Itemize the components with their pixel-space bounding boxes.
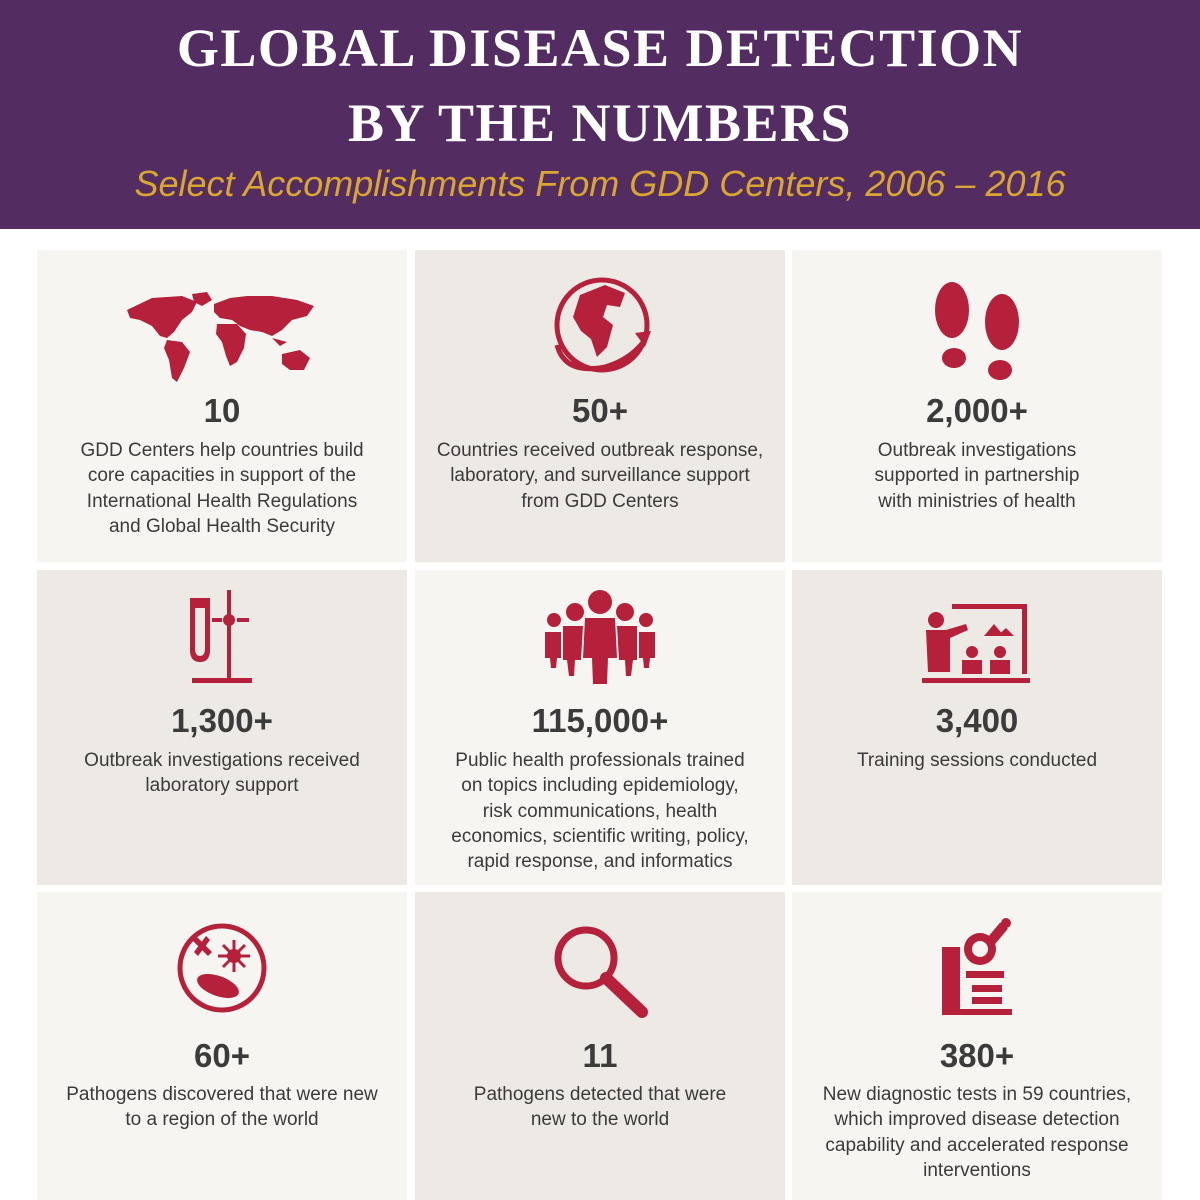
text: [474, 1084, 726, 1130]
text: [66, 1084, 378, 1130]
text: [451, 750, 749, 872]
text: [84, 750, 360, 796]
title line 1: GLOBAL DISEASE DETECTION: [177, 18, 1023, 78]
subtitle: Select Accomplishments From GDD Centers, 2006 – 2016: [134, 163, 1066, 204]
title line 2: BY THE NUMBERS: [348, 93, 852, 153]
text: Outbreak investigations: [878, 440, 1076, 461]
text: Pathogens detected that were: [474, 1084, 726, 1105]
number: 10: [204, 392, 240, 429]
text: supported in partnership: [875, 465, 1079, 486]
text: New diagnostic tests in 59 countries,: [823, 1084, 1131, 1105]
text: interventions: [923, 1160, 1031, 1181]
text: laboratory support: [145, 775, 299, 796]
icon: classroom: [922, 604, 1030, 683]
number: 1,300+: [171, 702, 273, 739]
text: Outbreak investigations received: [84, 750, 360, 771]
panel: 1,300+ lab support: [37, 570, 407, 885]
panel: 2,000+ investigations: [792, 250, 1162, 562]
number: 11: [583, 1037, 617, 1074]
panel: 60+ pathogens: [37, 892, 407, 1200]
icon: microscope: [942, 918, 1012, 1015]
text: core capacities in support of the: [88, 465, 356, 486]
text: rapid response, and informatics: [467, 851, 733, 872]
text: [823, 1084, 1131, 1181]
text: [80, 440, 364, 537]
text: [437, 440, 763, 512]
text: to a region of the world: [125, 1109, 319, 1130]
number: 2,000+: [926, 392, 1028, 429]
text: Training sessions conducted: [857, 750, 1097, 771]
text: and Global Health Security: [109, 516, 335, 537]
text: with ministries of health: [878, 491, 1076, 512]
icon: magnifying glass: [554, 926, 648, 1018]
text: laboratory, and surveillance support: [450, 465, 750, 486]
panel: 11 new pathogens: [415, 892, 785, 1200]
panel: 3,400 training sessions: [792, 570, 1162, 885]
icon: world map: [127, 292, 314, 382]
text: [875, 440, 1079, 512]
text: risk communications, health: [483, 801, 717, 822]
text: Pathogens discovered that were new: [66, 1084, 378, 1105]
text: GDD Centers help countries build: [80, 440, 364, 461]
header: [0, 0, 1200, 229]
text: new to the world: [531, 1109, 669, 1130]
text: economics, scientific writing, policy,: [451, 826, 749, 847]
icon: footprints: [935, 282, 1019, 380]
number: 50+: [572, 392, 628, 429]
number: 60+: [194, 1037, 250, 1074]
icon: test tube stand: [190, 590, 252, 683]
text: on topics including epidemiology,: [461, 775, 739, 796]
text: Countries received outbreak response,: [437, 440, 763, 461]
number: 115,000+: [532, 702, 668, 739]
text: capability and accelerated response: [825, 1135, 1129, 1156]
text: from GDD Centers: [521, 491, 679, 512]
panel: 10 GDD centers: [37, 250, 407, 562]
icon: pathogen circle: [178, 924, 266, 1012]
icon: group of people: [545, 590, 655, 684]
panel: 380+ diagnostic tests: [792, 892, 1162, 1200]
text: which improved disease detection: [834, 1109, 1120, 1130]
panel: 50+ countries: [415, 250, 785, 562]
panel: 115,000+ trained: [415, 570, 785, 885]
icon: globe with arrow: [554, 278, 651, 372]
text: Public health professionals trained: [455, 750, 745, 771]
number: 380+: [940, 1037, 1014, 1074]
text: International Health Regulations: [87, 491, 357, 512]
number: 3,400: [936, 702, 1018, 739]
